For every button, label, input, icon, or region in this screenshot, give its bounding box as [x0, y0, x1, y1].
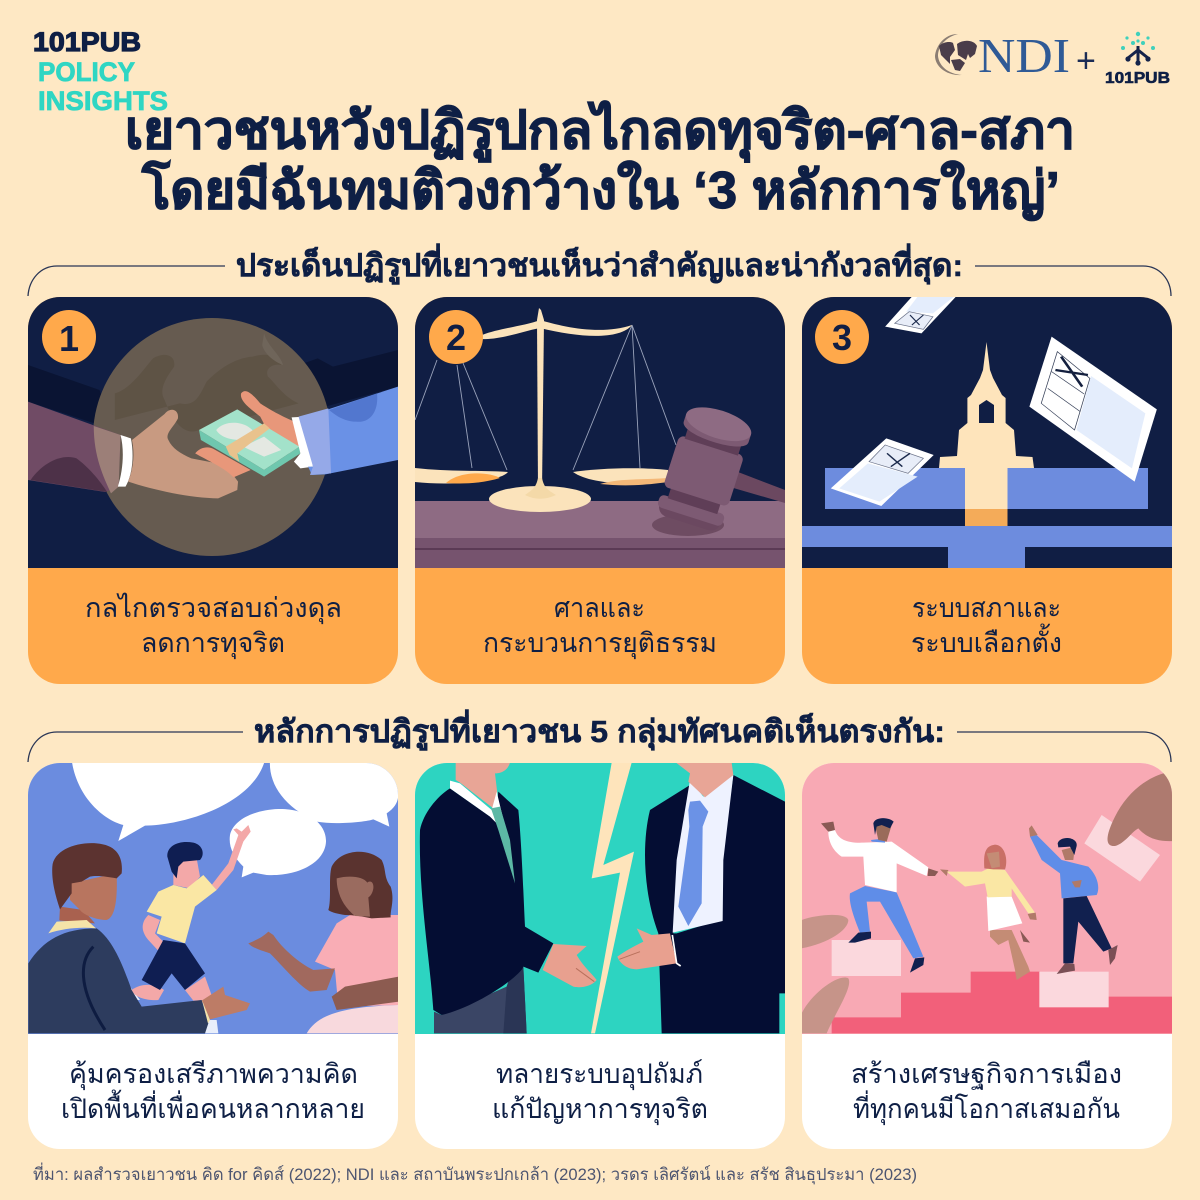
- caption: dismantle patronage: [492, 1058, 708, 1126]
- icon: NDI globe: [935, 34, 977, 75]
- heading: shared reform principles: หลักการปฏิรูปที่เยาวชน 5 กลุ่มทัศนคติเห็นตรงกัน:: [254, 709, 945, 751]
- title: โดยมีฉันทมติวงกว้างใน ‘3 หลักการใหญ่’: [141, 159, 1060, 221]
- badge: 3: [815, 310, 869, 364]
- icon: 101PUB network: [1121, 32, 1155, 66]
- caption: dismantle patronage: ทลายระบบอุปถัมภ์: [496, 1058, 703, 1091]
- illustration: people in conversation: [28, 760, 398, 1034]
- logo: 101PUB Policy Insights: 101PUB: [33, 27, 141, 57]
- caption: courts and justice: ศาลและ: [554, 593, 645, 623]
- caption: checks and balances: [85, 593, 342, 660]
- panel: protect freedom of thought: [28, 760, 398, 1149]
- caption: freedom of thought: [61, 1059, 365, 1124]
- caption: checks and balances: ลดการทุจริต: [141, 628, 285, 660]
- logo: NDI plus 101PUB: NDI: [978, 28, 1070, 83]
- badge: 2: 2: [446, 317, 466, 358]
- badge: 3: 3: [832, 317, 852, 358]
- heading: key reform issues: [28, 243, 1171, 296]
- caption: parliament and elections: ระบบสภาและ: [912, 593, 1061, 623]
- logo: 101PUB Policy Insights: POLICY: [38, 57, 135, 87]
- illustration: scales and gavel: [415, 297, 785, 568]
- logo: NDI plus 101PUB: +: [1076, 42, 1096, 80]
- caption: parliament and elections: ระบบเลือกตั้ง: [911, 623, 1062, 658]
- caption: equal opportunity: [851, 1059, 1122, 1126]
- logo: NDI plus 101PUB: 101PUB: [1105, 70, 1170, 87]
- caption: equal opportunity: สร้างเศรษฐกิจการเมือง: [851, 1059, 1122, 1090]
- logo: NDI plus 101PUB: [935, 28, 1170, 87]
- caption: checks and balances: กลไกตรวจสอบถ่วงดุล: [85, 593, 342, 625]
- illustration: bribe handshake: [28, 297, 398, 568]
- title: เยาวชนหวังปฏิรูปกลไกลดทุจริต-ศาล-สภา: [125, 100, 1075, 163]
- panel: courts and justice: [415, 297, 785, 684]
- heading: shared reform principles: [28, 709, 1171, 762]
- source note: ที่มา: ผลสำรวจเยาวชน คิด for คิดส์ (2022); NDI และ สถาบันพระปกเกล้า (2023); วรดร เลิศรัตน์ และ สรัช สินธุประมา (2023): [33, 1162, 917, 1185]
- panel: checks and balances: [28, 297, 398, 684]
- illustration: broken handshake: [415, 763, 785, 1034]
- caption: freedom of thought: เปิดพื้นที่เพื่อคนหลากหลาย: [61, 1089, 365, 1124]
- caption: parliament and elections: [911, 593, 1062, 658]
- caption: equal opportunity: ที่ทุกคนมีโอกาสเสมอกัน: [853, 1090, 1120, 1126]
- heading: key reform issues: ประเด็นปฏิรูปที่เยาวชนเห็นว่าสำคัญและน่ากังวลที่สุด:: [236, 243, 963, 285]
- logo: 101PUB Policy Insights: [33, 27, 168, 116]
- caption: dismantle patronage: แก้ปัญหาการทุจริต: [492, 1094, 708, 1126]
- caption: freedom of thought: คุ้มครองเสรีภาพความคิด: [69, 1059, 358, 1091]
- title: [125, 100, 1075, 221]
- panel: dismantle patronage: [415, 763, 785, 1149]
- caption: courts and justice: กระบวนการยุติธรรม: [483, 628, 717, 660]
- illustration: parliament and ballots: [802, 297, 1172, 568]
- logo: 101PUB Policy Insights: INSIGHTS: [38, 86, 168, 116]
- icon: gavel: [652, 401, 785, 536]
- badge: 1: 1: [59, 318, 79, 359]
- illustration: people climbing steps: [802, 763, 1173, 1034]
- caption: courts and justice: [483, 593, 717, 660]
- panel: parliament and elections: [802, 297, 1172, 684]
- panel: equal opportunity: [802, 763, 1173, 1149]
- badge: 2: [429, 310, 483, 364]
- badge: 1: [42, 310, 96, 364]
